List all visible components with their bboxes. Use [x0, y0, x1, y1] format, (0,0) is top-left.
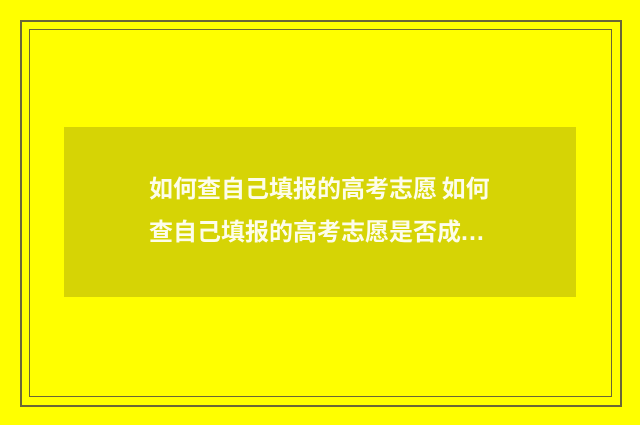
panel: title banner [64, 127, 576, 297]
title text: 查自己填报的高考志愿是否成... [149, 218, 485, 246]
title text: 如何查自己填报的高考志愿 如何 [149, 176, 490, 203]
title text [149, 176, 490, 246]
inner border frame [29, 29, 612, 397]
